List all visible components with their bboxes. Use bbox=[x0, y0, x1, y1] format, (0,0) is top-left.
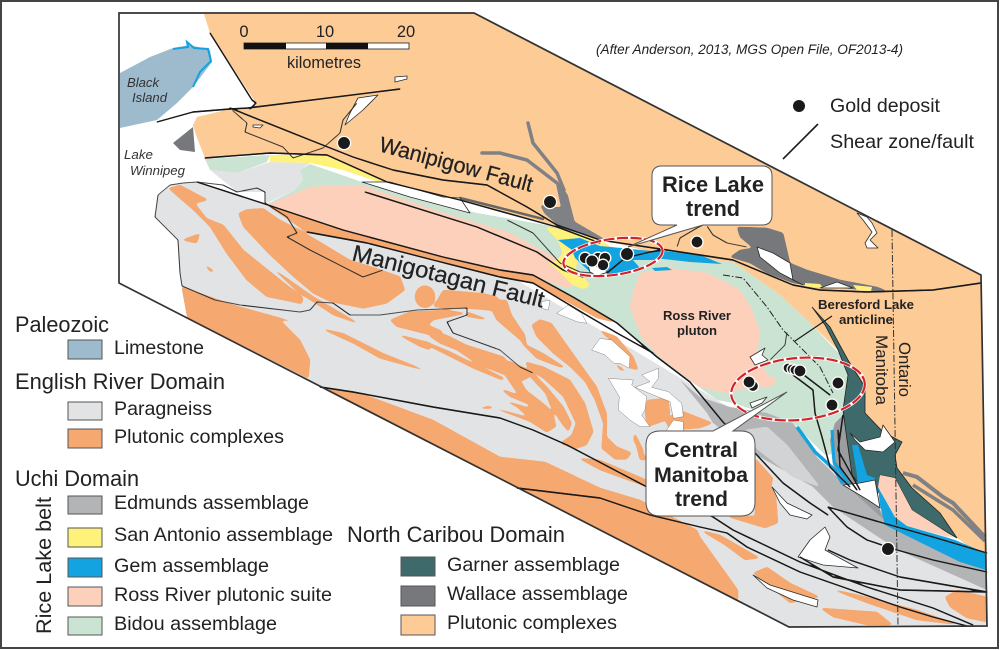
callout: Rice Lake trend: Rice Lake bbox=[662, 172, 764, 197]
legend group: Paleozoic: Paleozoic bbox=[15, 312, 109, 337]
label: Ross River pluton bbox=[663, 308, 731, 338]
label: Wanipigow Fault: Wanipigow Fault bbox=[377, 132, 536, 197]
paragneiss inclusion in swirl bbox=[522, 377, 552, 410]
Wallace patches east bbox=[730, 227, 985, 541]
legend group: Uchi Domain: Bidou assemblage bbox=[114, 613, 277, 635]
Bidou west patch bbox=[205, 155, 270, 173]
Garner assemblage bbox=[812, 307, 957, 538]
map key: gold deposit and shear zone: Shear zone/fault bbox=[830, 131, 975, 153]
callout: Central Manitoba trend: Manitoba bbox=[654, 464, 748, 487]
provincial boundary bbox=[892, 230, 898, 625]
legend group: Uchi Domain: San Antonio assemblage bbox=[114, 524, 333, 546]
callout: Rice Lake trend: trend bbox=[686, 196, 740, 221]
legend group: Uchi Domain: Uchi Domain bbox=[15, 466, 139, 491]
Wallace branches north bbox=[460, 123, 605, 240]
Gem central bbox=[558, 238, 722, 277]
legend group: North Caribou Domain: North Caribou Domain bbox=[347, 522, 565, 547]
Ross River pluton body bbox=[630, 268, 777, 393]
labels: Black Island bbox=[127, 75, 168, 105]
English River plutonic complexes bbox=[168, 185, 987, 625]
label: Manigotagan Fault: Manigotagan Fault bbox=[350, 240, 548, 313]
San Antonio strip bbox=[270, 155, 388, 185]
label: Beresford Lake anticline: Beresford Lake bbox=[818, 297, 914, 312]
legend group: Paleozoic: Limestone bbox=[114, 337, 204, 359]
light Edmunds wedge bbox=[745, 427, 820, 487]
Black Island limestone bbox=[120, 42, 212, 128]
legend bbox=[15, 312, 628, 635]
legend group: Paleozoic bbox=[15, 312, 204, 359]
anticline trace bbox=[723, 275, 833, 393]
scale bar bbox=[239, 23, 415, 72]
callout: Central Manitoba trend bbox=[646, 392, 787, 516]
Edmunds infill east bbox=[830, 415, 887, 523]
thin contour lines bbox=[155, 103, 787, 373]
label: Ross River pluton: Ross River bbox=[663, 308, 731, 323]
scale bar: kilometres bbox=[287, 54, 361, 72]
legend group: Uchi Domain: Rice Lake belt bbox=[31, 497, 56, 634]
scale bar: 20 bbox=[397, 23, 415, 41]
Edmunds assemblage bbox=[680, 380, 987, 590]
scale bar: 0 bbox=[239, 23, 249, 41]
gold deposits bbox=[337, 136, 895, 556]
legend group: English River Domain: English River Domain bbox=[15, 369, 225, 394]
North Caribou plutonic complexes bbox=[193, 13, 987, 560]
labels: Black Island: Black bbox=[127, 75, 160, 90]
legend group: North Caribou Domain bbox=[347, 522, 628, 635]
legend group: Uchi Domain: Ross River plutonic suite bbox=[114, 584, 332, 606]
map key: gold deposit and shear zone bbox=[783, 95, 975, 159]
label: Manitoba: Manitoba bbox=[872, 335, 891, 406]
legend group: North Caribou Domain: Plutonic complexes bbox=[447, 612, 617, 634]
legend group: English River Domain: Plutonic complexes bbox=[114, 426, 284, 448]
labels: Black Island: Island bbox=[132, 90, 168, 105]
legend group: North Caribou Domain: Wallace assemblage bbox=[447, 583, 628, 605]
Gem east bands bbox=[797, 427, 986, 570]
trend ellipse: Rice Lake bbox=[561, 232, 665, 282]
paragneiss base bbox=[155, 182, 987, 627]
label: Ross River pluton: pluton bbox=[677, 323, 717, 338]
labels: Lake Winnipeg: Winnipeg bbox=[130, 163, 186, 178]
callout: Rice Lake trend bbox=[628, 166, 772, 247]
yellow east slivers bbox=[805, 283, 872, 291]
legend group: Uchi Domain bbox=[15, 466, 333, 635]
legend group: North Caribou Domain: Garner assemblage bbox=[447, 554, 620, 576]
callout: Central Manitoba trend: Central bbox=[664, 439, 738, 462]
Bidou assemblage bbox=[265, 164, 865, 455]
Ross River east wedge bbox=[878, 475, 955, 538]
legend group: Uchi Domain: Edmunds assemblage bbox=[114, 492, 309, 514]
faults and shear zones bbox=[157, 33, 987, 626]
Ross River plutonic strip bbox=[265, 185, 575, 288]
legend group: Uchi Domain: Gem assemblage bbox=[114, 555, 269, 577]
label: Ontario: Ontario bbox=[895, 342, 914, 397]
San Antonio central bbox=[545, 227, 612, 289]
scale bar: 10 bbox=[316, 23, 334, 41]
label: Beresford Lake anticline: anticline bbox=[839, 312, 893, 327]
labels: Lake Winnipeg bbox=[124, 147, 186, 178]
callout: Central Manitoba trend: trend bbox=[675, 488, 728, 511]
source credit: (After Anderson, 2013, MGS Open File, OF2013-4) bbox=[596, 42, 903, 57]
legend group: English River Domain: Paragneiss bbox=[114, 398, 212, 420]
paragneiss patch bbox=[210, 162, 310, 204]
label: Beresford Lake anticline bbox=[795, 297, 914, 341]
lakes bbox=[253, 76, 895, 607]
legend group: English River Domain bbox=[15, 369, 284, 448]
labels: Lake Winnipeg: Lake bbox=[124, 147, 153, 162]
Wallace assemblage west patch bbox=[173, 127, 195, 152]
map key: gold deposit and shear zone: Gold deposit bbox=[830, 95, 941, 117]
trend ellipse: Central Manitoba bbox=[729, 352, 867, 426]
